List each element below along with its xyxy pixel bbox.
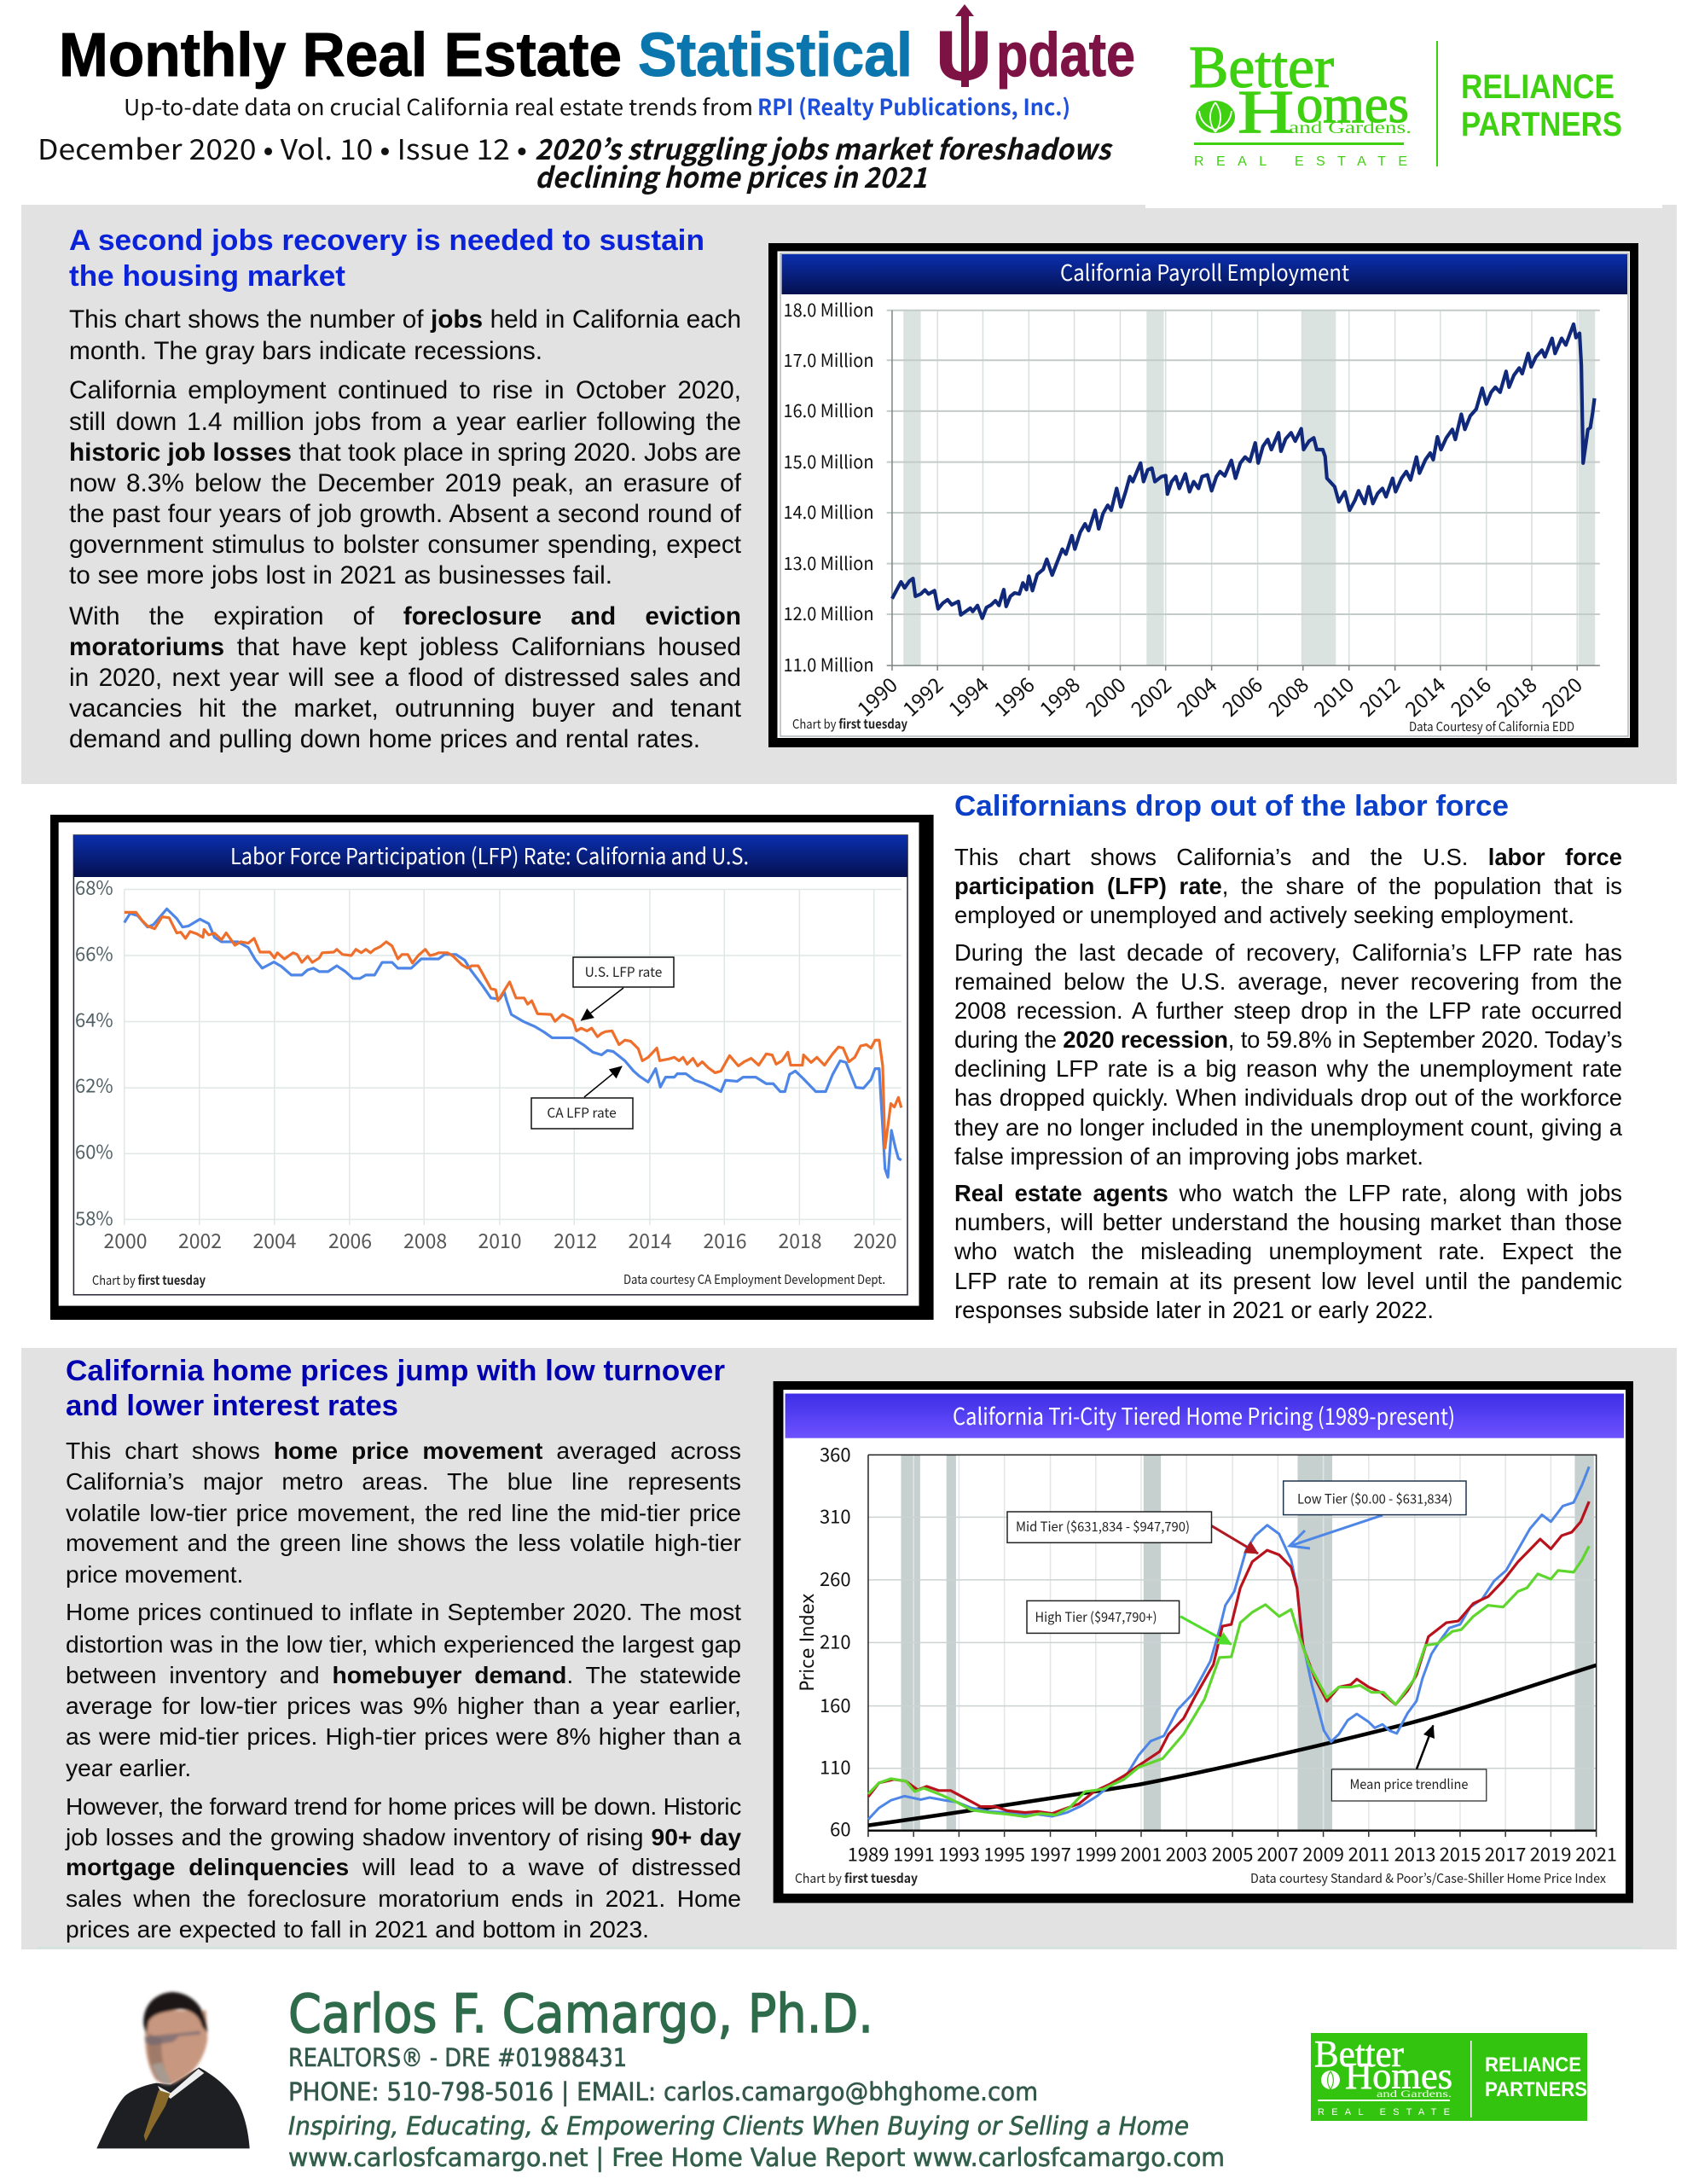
y-axis labels: 68% bbox=[75, 874, 113, 901]
x-axis year labels: 1990 bbox=[849, 670, 903, 722]
heading: jobs recovery bbox=[69, 224, 704, 293]
chart credits: Data courtesy Standard & Poor’s/Case-Shiller Home Price Index bbox=[1250, 1869, 1607, 1887]
text block: jobs recovery body copy: month. The gray bars indicate recessions. bbox=[69, 337, 542, 365]
text block: home prices body copy: volatile low-tier price movement, the red line the mid-tier price bbox=[66, 1499, 741, 1526]
x-axis labels: 2018 bbox=[778, 1225, 822, 1254]
chart credits bbox=[92, 1270, 885, 1289]
text block: home prices body copy: California’s major metro areas. The blue line represents bbox=[66, 1467, 741, 1495]
heading: jobs recovery: the housing market bbox=[69, 260, 345, 293]
y-axis labels: 310 bbox=[820, 1502, 851, 1530]
text block: jobs recovery body copy: to see more jobs lost in 2021 as businesses fail. bbox=[69, 561, 612, 590]
x-axis labels: 1999 bbox=[1075, 1840, 1116, 1867]
callout: high tier: High Tier ($947,790+) bbox=[1035, 1607, 1157, 1626]
x-axis labels bbox=[848, 1840, 1617, 1867]
x-axis labels: 2011 bbox=[1348, 1840, 1389, 1867]
text block: labor force body copy: This chart shows California’s and the U.S. labor force bbox=[954, 844, 1622, 870]
heading: home prices: and lower interest rates bbox=[66, 1390, 398, 1422]
panel: jobs recovery background bbox=[21, 205, 1677, 784]
logo: small green footer badge: and Gardens. bbox=[1377, 2088, 1452, 2100]
text block: home prices body copy: between inventory and homebuyer demand. The statewide bbox=[66, 1661, 741, 1688]
x-axis year labels: 2018 bbox=[1489, 670, 1542, 722]
text block: home prices body copy: average for low-tier prices was 9% higher than a year earlier, bbox=[66, 1692, 741, 1719]
text block: jobs recovery body copy: With the expiration of foreclosure and eviction bbox=[69, 602, 741, 630]
x-axis labels: 2012 bbox=[554, 1225, 597, 1254]
text block: home prices body copy: job losses and the growing shadow inventory of rising 90+ day bbox=[66, 1823, 741, 1850]
text block: labor force body copy: during the 2020 recession, to 59.8% in September 2020. Today’s bbox=[954, 1026, 1622, 1053]
y-axis labels: 160 bbox=[820, 1691, 851, 1718]
logo: Better Homes and Gardens Reliance Partners: and Gardens. bbox=[1289, 119, 1412, 137]
issue line and headline: 2020’s struggling jobs market foreshadows bbox=[535, 127, 1114, 168]
callout: mean price trendline bbox=[1331, 1725, 1487, 1801]
plot: payroll line with recession bars bbox=[887, 311, 1600, 671]
x-axis year labels: 1996 bbox=[987, 670, 1040, 722]
x-axis year labels: 1992 bbox=[895, 670, 948, 722]
x-axis labels: 1989 bbox=[848, 1840, 889, 1867]
plot: tiered price lines with recession bars bbox=[868, 1455, 1597, 1837]
x-axis labels: 1995 bbox=[983, 1840, 1025, 1867]
y-axis labels: 60 bbox=[830, 1815, 851, 1842]
text block: labor force body copy: has dropped quickly. When individuals drop out of the workforce bbox=[954, 1084, 1622, 1111]
heading: home prices bbox=[66, 1355, 725, 1422]
logo: Better Homes and Gardens Reliance Partners: RELIANCE bbox=[1461, 68, 1615, 106]
x-axis year labels: 2000 bbox=[1078, 670, 1131, 722]
plot: LFP lines bbox=[125, 889, 901, 1225]
x-axis labels: 2016 bbox=[703, 1225, 747, 1254]
y-axis labels: 110 bbox=[820, 1753, 851, 1780]
text block: labor force body copy: numbers, will better understand the housing market than those bbox=[954, 1209, 1622, 1235]
text block: jobs recovery body copy: vacancies hit the market, outrunning buyer and tenant bbox=[69, 694, 741, 723]
x-axis labels: 2014 bbox=[628, 1225, 672, 1254]
x-axis labels: 1993 bbox=[938, 1840, 980, 1867]
y-axis labels: 17.0 Million bbox=[783, 347, 873, 373]
x-axis labels: 2019 bbox=[1530, 1840, 1571, 1867]
chart credits: Data Courtesy of California EDD bbox=[1409, 717, 1574, 735]
y-axis labels bbox=[75, 874, 113, 1231]
text block: labor force body copy: 2008 recession. A further steep drop in the LFP rate occurred bbox=[954, 997, 1622, 1024]
logo: small green footer badge: Better bbox=[1314, 2033, 1404, 2075]
issue line and headline: declining home prices in 2021 bbox=[535, 155, 927, 196]
text block: labor force body copy: During the last decade of recovery, California’s LFP rate has bbox=[954, 939, 1622, 966]
text block: jobs recovery body copy: now 8.3% below the December 2019 peak, an erasure of bbox=[69, 469, 741, 497]
chart: California Tri-City Tiered Home Pricing bbox=[774, 1381, 1633, 1903]
agent contact lines: Inspiring, Educating, & Empowering Clients When Buying or Selling a Home bbox=[288, 2111, 1189, 2140]
x-axis year labels: 2008 bbox=[1261, 670, 1314, 722]
chart credits: Chart by first tuesday bbox=[795, 1869, 918, 1887]
title: U bbox=[936, 17, 992, 95]
x-axis year labels: 2010 bbox=[1306, 670, 1359, 722]
heading: jobs recovery: A second jobs recovery is needed to sustain bbox=[69, 224, 704, 257]
title: pdate bbox=[996, 21, 1135, 90]
x-axis labels: 1991 bbox=[893, 1840, 935, 1867]
panel: home prices background bbox=[21, 1348, 1677, 1949]
y-axis labels: 18.0 Million bbox=[783, 297, 873, 322]
chart title band bbox=[73, 835, 907, 877]
icon: leaf circle bbox=[1196, 101, 1235, 133]
logo: Better Homes and Gardens Reliance Partners bbox=[1145, 35, 1662, 208]
logo: Better Homes and Gardens Reliance Partners: Better bbox=[1189, 35, 1334, 101]
chart credits bbox=[792, 715, 1574, 735]
y-axis labels: 13.0 Million bbox=[783, 550, 873, 576]
text block: jobs recovery body copy: California employment continued to rise in October 2020, bbox=[69, 376, 741, 404]
x-axis year labels: 2016 bbox=[1443, 670, 1497, 722]
y-axis labels: 62% bbox=[75, 1072, 113, 1099]
chart: California Payroll Employment bbox=[768, 243, 1638, 747]
chart credits bbox=[795, 1869, 1607, 1887]
text block: labor force body copy: LFP rate to remain at its present low level until the pandemic bbox=[954, 1268, 1622, 1294]
chart credits: Data courtesy CA Employment Development Dept. bbox=[623, 1270, 885, 1288]
y-axis labels bbox=[783, 297, 873, 677]
text block: labor force body copy: participation (LFP) rate, the share of the population that is bbox=[954, 873, 1622, 899]
y-axis title: Price Index bbox=[797, 1594, 819, 1691]
y-axis labels bbox=[820, 1440, 851, 1842]
text block: labor force body copy: Real estate agents who watch the LFP rate, along with jobs bbox=[954, 1180, 1622, 1206]
x-axis labels: 2017 bbox=[1485, 1840, 1526, 1867]
title: Monthly Real Estate bbox=[59, 21, 622, 90]
y-axis labels: 260 bbox=[820, 1565, 851, 1592]
agent contact lines: www.carlosfcamargo.net | Free Home Value Report www.carlosfcamargo.com bbox=[288, 2143, 1225, 2172]
issue line and headline bbox=[38, 127, 1114, 196]
text block: home prices body copy: mortgage delinquencies will lead to a wave of distressed bbox=[66, 1853, 741, 1880]
callout: U.S. LFP rate: U.S. LFP rate bbox=[585, 962, 662, 981]
text block: labor force body copy: false impression of an improving jobs market. bbox=[954, 1143, 1423, 1170]
x-axis labels: 2015 bbox=[1440, 1840, 1481, 1867]
y-axis labels: 11.0 Million bbox=[783, 652, 873, 677]
text block: jobs recovery body copy: demand and pulling down home prices and rental rates. bbox=[69, 725, 700, 753]
x-axis labels: 2001 bbox=[1121, 1840, 1162, 1867]
x-axis labels bbox=[103, 1225, 897, 1254]
x-axis labels: 2010 bbox=[478, 1225, 522, 1254]
portrait: agent photo bbox=[96, 1992, 250, 2148]
text block: jobs recovery body copy: in 2020, next year will see a flood of distressed sales and bbox=[69, 664, 741, 692]
chart title band: California Payroll Employment bbox=[1060, 256, 1349, 288]
y-axis labels: 210 bbox=[820, 1628, 851, 1655]
callout: high tier bbox=[1027, 1600, 1232, 1644]
x-axis labels: 1997 bbox=[1029, 1840, 1071, 1867]
logo: Better Homes and Gardens Reliance Partners: H bbox=[1238, 78, 1294, 146]
y-axis labels: 66% bbox=[75, 939, 113, 967]
y-axis labels: 15.0 Million bbox=[783, 449, 873, 474]
y-axis labels: 58% bbox=[75, 1204, 113, 1231]
chart: Labor Force Participation Rate bbox=[50, 815, 934, 1320]
agent name: Carlos F. Camargo, Ph.D. bbox=[288, 1983, 873, 2045]
callout: mid tier: Mid Tier ($631,834 - $947,790) bbox=[1016, 1517, 1190, 1536]
chart credits: Chart by first tuesday bbox=[792, 715, 907, 733]
text block: labor force body copy: remained below the U.S. average, never recovering from the bbox=[954, 968, 1622, 995]
x-axis labels: 2006 bbox=[328, 1225, 372, 1254]
x-axis labels: 2007 bbox=[1257, 1840, 1298, 1867]
callout: low tier: Low Tier ($0.00 - $631,834) bbox=[1297, 1490, 1452, 1508]
text block: jobs recovery body copy: This chart shows the number of jobs held in California each bbox=[69, 305, 741, 334]
text block: home prices body copy: Home prices continued to inflate in September 2020. The most bbox=[66, 1598, 741, 1625]
text block: labor force body copy: responses subside later in 2021 or early 2022. bbox=[954, 1297, 1434, 1323]
x-axis labels: 2000 bbox=[103, 1225, 148, 1254]
logo: small green footer badge: REAL ESTATE bbox=[1318, 2107, 1450, 2117]
x-axis labels: 2020 bbox=[853, 1225, 897, 1254]
x-axis year labels: 1994 bbox=[941, 670, 994, 722]
y-axis labels: 16.0 Million bbox=[783, 398, 873, 423]
x-axis year labels: 2014 bbox=[1397, 670, 1451, 722]
y-axis labels: 360 bbox=[820, 1440, 851, 1467]
x-axis labels: 2009 bbox=[1302, 1840, 1344, 1867]
y-axis labels: 64% bbox=[75, 1006, 113, 1033]
text block: home prices body copy bbox=[65, 1437, 741, 1943]
heading: home prices: California home prices jump with low turnover bbox=[66, 1355, 725, 1387]
x-axis year labels: 2002 bbox=[1123, 670, 1177, 722]
text block: home prices body copy: price movement. bbox=[66, 1560, 243, 1588]
text block: jobs recovery body copy: moratoriums that have kept jobless Californians housed bbox=[69, 633, 741, 661]
text block: labor force body copy: declining LFP rate is a big reason why the unemployment rate bbox=[954, 1055, 1622, 1082]
callout: CA LFP rate: CA LFP rate bbox=[547, 1103, 617, 1122]
text block: jobs recovery body copy: the past four years of job growth. Absent a second round of bbox=[69, 500, 741, 528]
text block: jobs recovery body copy: historic job losses that took place in spring 2020. Jobs are bbox=[69, 439, 741, 467]
text block: labor force body copy: employed or unemployed and actively seeking employment. bbox=[954, 902, 1574, 928]
y-axis labels: 14.0 Million bbox=[783, 499, 873, 525]
x-axis labels: 2008 bbox=[403, 1225, 447, 1254]
callout: mid tier bbox=[1007, 1512, 1258, 1554]
y-axis labels: 60% bbox=[75, 1137, 113, 1165]
title bbox=[59, 4, 1135, 95]
text block: labor force body copy bbox=[954, 844, 1622, 1323]
title: Statistical bbox=[638, 21, 913, 90]
text block: home prices body copy: year earlier. bbox=[66, 1754, 191, 1781]
text block: home prices body copy: as were mid-tier prices. High-tier prices were 8% higher than a bbox=[66, 1722, 741, 1750]
logo: small green footer badge: Homes bbox=[1345, 2055, 1452, 2097]
logo: Better Homes and Gardens Reliance Partners: omes bbox=[1296, 76, 1409, 134]
chart title band: Labor Force Participation (LFP) Rate: California and U.S. bbox=[230, 839, 749, 871]
logo: small green footer badge: PARTNERS bbox=[1485, 2078, 1587, 2101]
x-axis labels: 2021 bbox=[1575, 1840, 1617, 1867]
callout: U.S. LFP rate bbox=[573, 957, 674, 1020]
logo: Better Homes and Gardens Reliance Partners: PARTNERS bbox=[1461, 106, 1622, 143]
text block: jobs recovery body copy: government stimulus to bolster consumer spending, expect bbox=[69, 531, 741, 559]
text block: labor force body copy: they are no longer included in the unemployment count, giving a bbox=[954, 1114, 1622, 1141]
callout: mean price trendline: Mean price trendline bbox=[1349, 1774, 1469, 1793]
text block: home prices body copy: This chart shows home price movement averaged across bbox=[66, 1437, 741, 1464]
agent contact lines bbox=[288, 2043, 1225, 2172]
agent contact lines: PHONE: 510-798-5016 | EMAIL: carlos.camargo@bhghome.com bbox=[288, 2077, 1038, 2106]
x-axis year labels: 2004 bbox=[1169, 670, 1223, 722]
y-axis labels: 12.0 Million bbox=[783, 601, 873, 626]
subtitle: RPI (Realty Publications, Inc.) bbox=[757, 90, 1070, 122]
chart title band bbox=[781, 254, 1627, 294]
text block: home prices body copy: However, the forward trend for home prices will be down. Historic bbox=[66, 1792, 741, 1820]
text block: home prices body copy: sales when the foreclosure moratorium ends in 2021. Home bbox=[66, 1885, 741, 1912]
x-axis labels: 2005 bbox=[1212, 1840, 1253, 1867]
x-axis year labels: 1998 bbox=[1032, 670, 1086, 722]
text block: jobs recovery body copy: still down 1.4 million jobs from a year earlier following the bbox=[69, 408, 741, 436]
callout: low tier bbox=[1284, 1481, 1466, 1548]
text block: labor force body copy: who watch the misleading unemployment rate. Expect the bbox=[954, 1238, 1622, 1264]
chart credits: Chart by first tuesday bbox=[92, 1271, 206, 1289]
agent contact lines: REALTORS® - DRE #01988431 bbox=[288, 2043, 627, 2072]
logo: Better Homes and Gardens Reliance Partners: REAL ESTATE bbox=[1194, 154, 1407, 169]
x-axis year labels bbox=[849, 670, 1588, 722]
logo: small green footer badge: RELIANCE bbox=[1485, 2053, 1581, 2077]
text block: home prices body copy: movement and the green line shows the less volatile high-tier bbox=[66, 1529, 741, 1556]
x-axis labels: 2002 bbox=[178, 1225, 222, 1254]
text block: home prices body copy: prices are expected to fall in 2021 and bottom in 2023. bbox=[66, 1915, 649, 1943]
chart title band bbox=[786, 1394, 1624, 1438]
x-axis year labels: 2006 bbox=[1215, 670, 1268, 722]
logo: small green footer badge bbox=[1311, 2033, 1587, 2121]
icon: up arrow through the U bbox=[955, 4, 974, 87]
text block: home prices body copy: distortion was in the low tier, which experienced the largest gap bbox=[66, 1630, 741, 1658]
x-axis year labels: 2020 bbox=[1534, 670, 1588, 722]
subtitle bbox=[124, 90, 1070, 122]
chart title band: California Tri-City Tiered Home Pricing (1989-present) bbox=[953, 1398, 1455, 1432]
x-axis labels: 2013 bbox=[1394, 1840, 1435, 1867]
x-axis year labels: 2012 bbox=[1352, 670, 1406, 722]
callout: CA LFP rate bbox=[531, 1066, 633, 1129]
heading: labor force: Californians drop out of the labor force bbox=[954, 790, 1509, 822]
issue line and headline: December 2020 • Vol. 10 • Issue 12 • bbox=[38, 127, 527, 168]
x-axis labels: 2003 bbox=[1166, 1840, 1207, 1867]
text block: jobs recovery body copy bbox=[69, 305, 742, 753]
subtitle: Up-to-date data on crucial California real estate trends from bbox=[124, 90, 753, 122]
x-axis labels: 2004 bbox=[252, 1225, 297, 1254]
